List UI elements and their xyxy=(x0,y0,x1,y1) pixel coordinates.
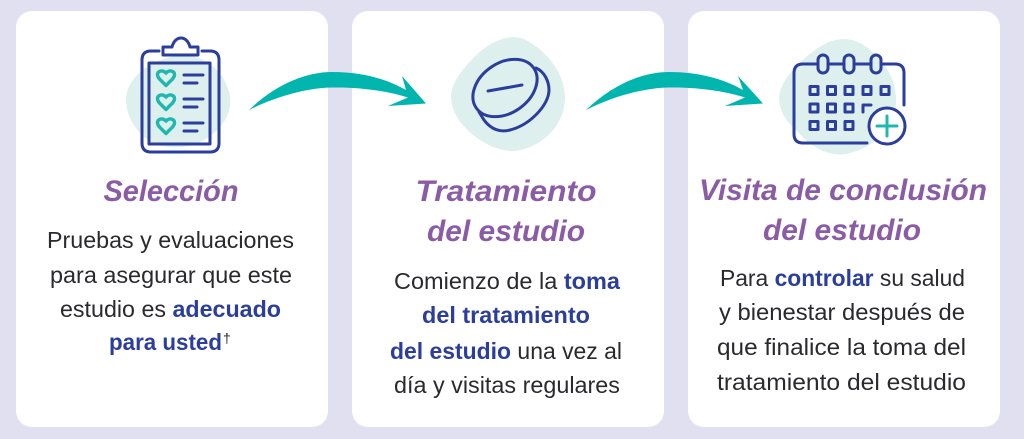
text: selección description xyxy=(47,227,294,355)
arrow: tratamiento to conclusión xyxy=(586,72,763,110)
heading: selección: Selección xyxy=(104,175,238,208)
text: conclusión description: Para controlar su salud xyxy=(720,265,965,291)
text: selección description: para usted xyxy=(109,329,222,355)
text: selección description: para asegurar que este xyxy=(50,262,292,288)
heading: tratamiento del estudio xyxy=(416,175,596,248)
arrow: selección to tratamiento xyxy=(249,72,426,110)
heading: visita de conclusión del estudio xyxy=(699,174,987,247)
text: tratamiento description: del estudio una vez al xyxy=(390,338,622,364)
panel: visita de conclusión xyxy=(688,11,1000,427)
panel: tratamiento del estudio xyxy=(352,11,664,427)
text: selección description: estudio es adecuado xyxy=(60,296,281,322)
icon: calendar with plus xyxy=(779,39,905,154)
heading: tratamiento del estudio: del estudio xyxy=(427,215,585,248)
text: conclusión description xyxy=(717,265,966,395)
text: tratamiento description: día y visitas regulares xyxy=(394,372,620,398)
text: tratamiento description: del tratamiento xyxy=(422,302,590,328)
text: conclusión description: tratamiento del estudio xyxy=(717,369,966,395)
heading: visita de conclusión del estudio: del estudio xyxy=(763,214,921,247)
icon: clipboard with hearts xyxy=(126,38,230,152)
icon: pill xyxy=(451,37,565,151)
text: selección description: † xyxy=(223,330,231,346)
panel: selección xyxy=(16,11,328,427)
text: selección description: Pruebas y evaluaciones xyxy=(47,227,294,253)
text: tratamiento description: Comienzo de la toma xyxy=(394,268,621,294)
heading: tratamiento del estudio: Tratamiento xyxy=(416,175,596,208)
text: conclusión description: y bienestar después de xyxy=(719,299,965,325)
text: tratamiento description xyxy=(390,268,622,398)
heading: visita de conclusión del estudio: Visita de conclusión xyxy=(699,174,987,207)
text: conclusión description: que finalice la toma del xyxy=(717,334,966,360)
